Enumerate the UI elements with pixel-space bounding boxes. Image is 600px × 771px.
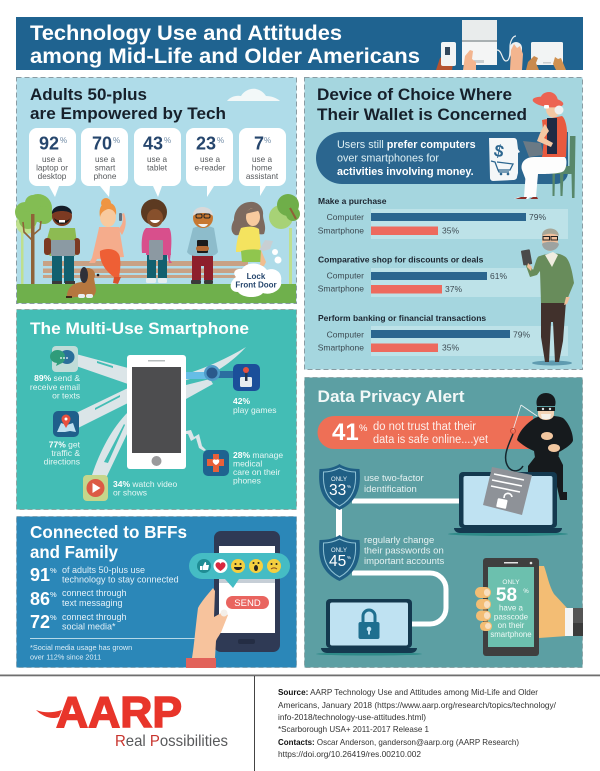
callout: prefer computers: Users still prefer computers — [337, 139, 476, 151]
feature labels: or texts — [52, 390, 80, 400]
feature labels: medical — [233, 458, 262, 468]
chart: banking — [318, 313, 568, 356]
panel: device of choice — [304, 78, 582, 370]
bench — [43, 261, 248, 278]
thought bubble: lock front door: Lock — [247, 272, 266, 281]
laptop with unlocked document — [448, 467, 568, 536]
stat bubbles: phone — [94, 172, 117, 181]
connectors — [339, 501, 462, 624]
person: man with laptop — [44, 206, 80, 284]
callout: prefer computers: activities involving money. — [337, 166, 474, 178]
text: two-factor — [364, 473, 424, 495]
trees — [15, 194, 300, 295]
feature labels — [30, 373, 283, 498]
stat bubbles: smart — [95, 164, 116, 172]
stat bubbles: 70 — [92, 134, 112, 154]
stat bubbles: % — [164, 136, 171, 145]
stat bubbles: desktop — [38, 172, 67, 181]
heading: Their Wallet is Concerned — [317, 105, 527, 124]
chart: comparative shop: 37% — [445, 284, 462, 294]
phone passcode text: passcode — [494, 612, 529, 622]
title: Technology Use and Attitudes — [30, 21, 342, 45]
thought bubble: lock front door — [231, 249, 282, 297]
cloud — [227, 89, 280, 101]
logo: AARP: Real Possibilities — [115, 733, 228, 750]
person: woman with tablet — [141, 199, 172, 283]
stat bubbles: 92 — [39, 134, 59, 154]
icon: hands using devices — [436, 20, 566, 70]
feature labels: 42% — [233, 396, 250, 406]
chart: make a purchase: Make a purchase — [318, 196, 387, 206]
fishing hook and line — [506, 405, 537, 471]
chart: make a purchase: Smartphone — [318, 226, 364, 236]
standing man with phone — [521, 228, 574, 366]
feature labels: 34% watch video — [113, 479, 178, 489]
source text: Americans, January 2018 (https://www.aarp.org/research/topics/technology/ — [278, 700, 557, 710]
stat bubbles: % — [217, 136, 224, 145]
blue tool handle — [186, 365, 234, 381]
shield: 33 percent: 33 — [329, 482, 346, 499]
stat bubbles: assistant — [246, 172, 279, 181]
icon: message — [50, 346, 78, 372]
icon: play — [83, 475, 108, 501]
phone — [127, 355, 186, 469]
stat bubbles — [29, 128, 286, 197]
callout: 41 percent — [318, 416, 533, 449]
stat bubbles: 23 — [196, 134, 216, 154]
callout: prefer computers: $ — [492, 141, 506, 162]
heading: The Multi-Use Smartphone — [30, 319, 249, 338]
chart: make a purchase — [318, 196, 568, 239]
callout: prefer computers: over smartphones for — [337, 152, 439, 164]
stat bubbles: 7 — [254, 134, 264, 154]
panel: the multi-use smartphone — [16, 310, 296, 510]
stat bubbles: % — [60, 136, 67, 145]
dog — [66, 267, 99, 298]
stats — [30, 565, 179, 632]
thought bubble: lock front door: Front Door — [235, 280, 277, 290]
phone passcode text: 58 — [496, 585, 517, 606]
stat bubbles: laptop or — [36, 164, 68, 172]
heading: and Family — [30, 542, 118, 562]
source text: Contacts: Oscar Anderson, ganderson@aarp.org (AARP Research) — [278, 737, 519, 747]
stat bubbles: use a — [42, 155, 62, 164]
icon: map — [53, 411, 79, 437]
source text: https://doi.org/10.26419/res.00210.002 — [278, 749, 421, 759]
chart: banking: Perform banking or financial transactions — [318, 313, 486, 323]
chart: make a purchase: Computer — [327, 212, 364, 222]
thief — [517, 393, 573, 500]
panel: data privacy alert — [304, 378, 583, 668]
chart: banking: 35% — [442, 342, 459, 352]
panel: adults 50-plus empowered by tech — [15, 78, 300, 304]
knife tools — [76, 347, 246, 476]
text: passwords: important accounts — [364, 556, 445, 567]
header banner — [16, 17, 583, 70]
stats: technology to stay connected — [62, 574, 179, 584]
panel: connected to BFFs and family — [16, 516, 296, 668]
heading — [30, 522, 187, 562]
stat bubbles: tablet — [147, 164, 168, 172]
source text: Source: AARP Technology Use and Attitudes among Mid-Life and Older — [278, 687, 538, 697]
chart: comparative shop: Smartphone — [318, 284, 364, 294]
heading: are Empowered by Tech — [30, 105, 226, 123]
chart: make a purchase: 35% — [442, 226, 459, 236]
stat bubbles: use a — [147, 155, 167, 164]
chart: banking: 79% — [513, 330, 530, 340]
shield: 45 percent: 45 — [329, 553, 346, 570]
icon: joystick — [233, 364, 260, 391]
stats: % — [50, 566, 57, 575]
feature labels: care on their — [233, 467, 280, 477]
heading — [317, 85, 527, 124]
stats: % — [50, 590, 57, 599]
heading — [30, 86, 226, 123]
shield: 33 percent — [319, 464, 360, 510]
hand holding phone — [475, 558, 583, 656]
callout: prefer computers — [316, 132, 568, 184]
feature labels: or shows — [113, 488, 147, 498]
callout: 41 percent: % — [359, 423, 368, 434]
callout: 41 percent: do not trust that their — [373, 421, 476, 433]
ground — [17, 284, 296, 303]
phone with emoji reactions — [186, 531, 290, 668]
footnote — [30, 643, 132, 662]
stat bubbles: use a — [95, 155, 115, 164]
footer rule — [0, 674, 600, 676]
shield: 33 percent: ONLY — [331, 477, 347, 483]
stats: connect through — [62, 588, 127, 598]
chart: make a purchase: 79% — [529, 212, 546, 222]
heading: Connected to BFFs — [30, 522, 187, 542]
shield: 45 percent — [319, 535, 360, 581]
person: woman with home assistant — [232, 202, 273, 266]
phone passcode text: on their — [498, 621, 525, 630]
woman on chair — [514, 92, 576, 199]
footnote: over 112% since 2011 — [30, 652, 101, 662]
logo: AARP: AARP — [56, 688, 182, 737]
stats: 86 — [30, 589, 50, 609]
send button: SEND — [234, 598, 261, 609]
logo: AARP — [36, 688, 228, 750]
person: woman with phone — [89, 198, 126, 284]
feature labels: 28% manage — [233, 450, 283, 460]
chart: comparative shop: Comparative shop for discounts or deals — [318, 254, 484, 264]
phone passcode text: have a — [499, 604, 524, 612]
shield: 45 percent: % — [347, 555, 351, 560]
emoji bar — [189, 553, 290, 588]
shield: 33 percent: % — [347, 484, 351, 489]
stat bubbles: e-reader — [195, 164, 226, 172]
stat bubbles: % — [113, 136, 120, 145]
feature labels: receive email — [30, 382, 80, 392]
laptop with lock — [316, 599, 422, 656]
heading: Data Privacy Alert — [318, 387, 465, 406]
feature labels: directions — [44, 456, 80, 466]
phone passcode text: smartphone — [490, 630, 532, 639]
callout: 41 percent: 41 — [332, 419, 359, 446]
phone passcode text: % — [523, 589, 529, 595]
text: passwords: their passwords on — [364, 546, 444, 556]
chart: comparative shop — [318, 254, 568, 297]
shield: 45 percent: ONLY — [331, 548, 347, 554]
callout: 41 percent: data is safe online....yet — [373, 434, 489, 446]
text: two-factor: use two-factor — [364, 473, 424, 484]
stats: 72 — [30, 612, 50, 632]
source text: *Scarborough USA+ 2011-2017 Release 1 — [278, 724, 429, 734]
chart: banking: Computer — [327, 330, 364, 340]
phone passcode text: ONLY — [502, 579, 520, 586]
feature labels: play games — [233, 405, 276, 415]
chart: comparative shop: 61% — [490, 271, 507, 281]
phone passcode text — [490, 579, 532, 639]
feature labels: 77% get — [49, 440, 81, 450]
stats: 91 — [30, 565, 50, 585]
stats: of adults 50-plus use — [62, 565, 145, 575]
stat bubbles: home — [252, 164, 273, 172]
stat bubbles: use a — [252, 155, 272, 164]
stats: social media* — [62, 622, 116, 632]
heading: Device of Choice Where — [317, 85, 512, 104]
text: passwords — [364, 535, 445, 567]
person: older man with e-reader — [187, 207, 218, 284]
feature labels: 89% send & — [34, 373, 80, 383]
source text: info-2018/technology-use-attitudes.html) — [278, 712, 426, 722]
footnote: *Social media usage has grown — [30, 643, 132, 652]
feature labels: phones — [233, 476, 261, 486]
title: among Mid-Life and Older Americans — [30, 44, 420, 68]
text: two-factor: identification — [364, 484, 417, 495]
feature labels: traffic & — [51, 448, 80, 458]
stat bubbles: 43 — [143, 134, 163, 154]
chart: banking: Smartphone — [318, 342, 364, 352]
hand — [192, 588, 228, 658]
title — [30, 21, 420, 68]
stats: connect through — [62, 612, 127, 622]
text: passwords: regularly change — [364, 535, 434, 546]
heading: Adults 50-plus — [30, 86, 147, 104]
chart: comparative shop: Computer — [327, 270, 364, 280]
icon: medical — [203, 450, 229, 476]
stats: text messaging — [62, 598, 123, 608]
source text — [278, 687, 557, 759]
stat bubbles: use a — [200, 155, 220, 164]
stats: % — [50, 613, 57, 622]
stat bubbles: % — [264, 136, 271, 145]
